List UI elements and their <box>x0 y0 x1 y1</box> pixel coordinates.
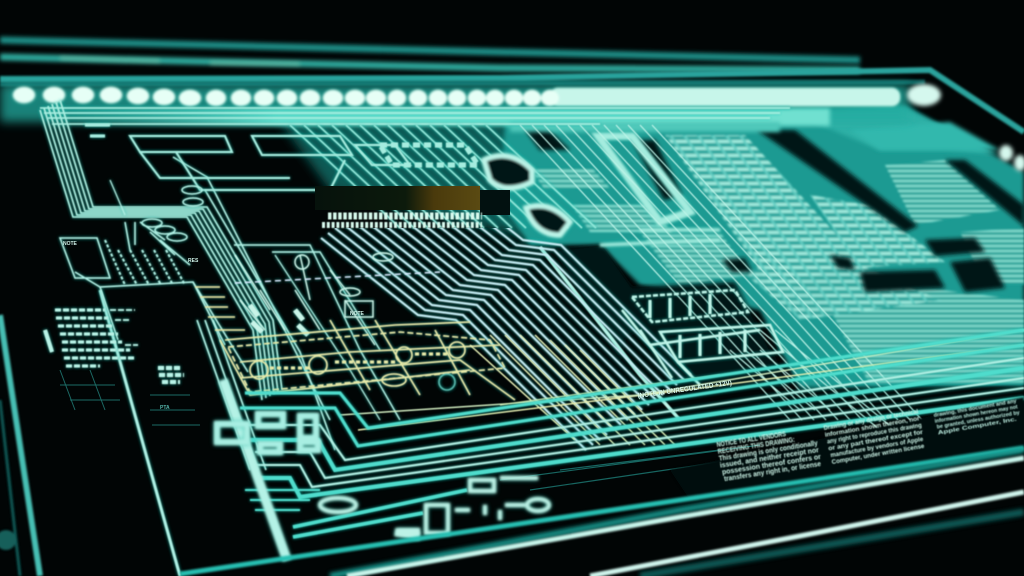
left stacked component block <box>45 310 184 382</box>
notice text block 2: Computer, under written license <box>831 443 925 466</box>
blurred blobs bottom left <box>217 414 318 452</box>
dark gaps in right board <box>520 122 1024 390</box>
blurred vertical power trace <box>223 380 287 560</box>
teal wash behind top centre traces <box>280 122 540 240</box>
note label: (NOTE IN UNREGULATED +12V) <box>637 380 732 400</box>
notice text block 1 <box>716 426 823 484</box>
notice text block 2: information shown thereon, nor <box>824 415 921 439</box>
bright corner LEDs <box>907 84 1024 171</box>
left glass edge <box>0 315 40 576</box>
schematic small labels: NOTE <box>63 241 78 247</box>
dark panel behind notice <box>670 397 1024 500</box>
notice text block 1: transfers any right in, or license <box>724 461 822 483</box>
notice text block 3: be granted, unless authorized by <box>936 410 1021 431</box>
notice text block 1: issued, and neither receipt nor <box>720 447 820 470</box>
schematic small labels: RES <box>188 258 199 264</box>
right component boxes <box>622 290 783 385</box>
upper frame glow bands <box>0 40 860 70</box>
nested thick horizontal traces <box>240 330 1024 537</box>
chip package <box>315 186 510 225</box>
yellow amplifier schematic <box>220 320 515 400</box>
notice text block 1: RECEIVING THIS DRAWING: <box>717 437 795 456</box>
diagonal traces crossing centre right <box>520 125 922 430</box>
notice text block 1: possession thereof confers or <box>722 454 822 476</box>
ring components near chip <box>484 156 570 235</box>
top-left trace bundle <box>40 100 790 400</box>
schematic small labels <box>63 241 365 411</box>
left logic schematic <box>60 186 248 372</box>
dense diagonal traces above chip <box>290 125 596 228</box>
schematic boxes along top <box>85 125 478 190</box>
notice text block 2: or any part thereof except for <box>828 429 924 452</box>
stepped trace bundle from chip <box>319 228 694 452</box>
schematic small labels: NOTE <box>350 311 365 317</box>
bottom glass edge lighting <box>180 448 1024 576</box>
blurred grid blocks on right <box>530 135 1024 385</box>
LED strip glow <box>0 84 910 132</box>
bottom connectors <box>320 478 549 536</box>
faint lower left grid <box>60 370 200 425</box>
dim traces beyond connectors <box>500 445 760 490</box>
notice text block 3 <box>933 398 1022 437</box>
notice text block 2: Drawing or any design or technical <box>823 408 919 432</box>
notice text block 2: manufacture by vendors of Apple <box>830 436 924 459</box>
LED strip <box>13 87 900 106</box>
notice text block 1: NOTICE TO ALL VENDORS <box>716 431 787 449</box>
central diode network <box>235 253 440 345</box>
board top edge and right frame <box>0 70 1024 132</box>
notice text block 2: any right to reproduce this drawing <box>827 422 922 446</box>
notice text block 3: Apple Computer, Inc. <box>937 417 1018 437</box>
ladder lattice upper centre <box>598 136 720 245</box>
teal plane on right of board <box>500 105 1024 388</box>
yellow crossing traces <box>340 330 1024 445</box>
long vertical traces <box>100 157 400 576</box>
schematic small labels: PTA <box>160 405 170 411</box>
notice text block 1: This drawing is only conditionally <box>718 440 818 463</box>
notice text block 3: drawing, this document and any <box>933 398 1018 419</box>
notice text block 2 <box>823 408 926 466</box>
